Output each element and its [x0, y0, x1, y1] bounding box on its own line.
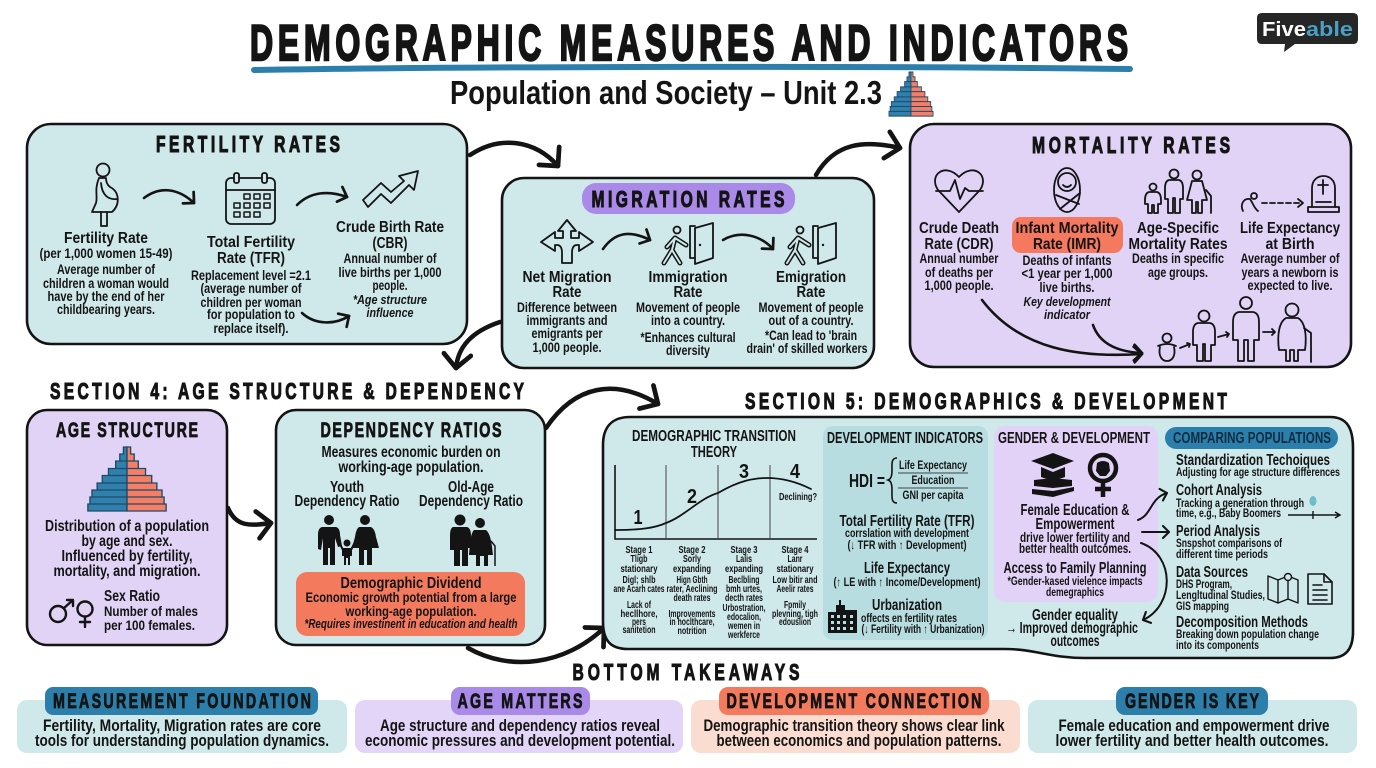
text: gender equality: Gender equality: [1032, 607, 1118, 624]
text: sex ratio: per 100 females.: [104, 618, 195, 633]
text: stage 4: Low bitir and: [772, 574, 818, 586]
text: comparing populations list: into its components: [1176, 638, 1259, 652]
heading: fertility rates: FERTILITY RATES: [156, 132, 340, 158]
text: emigration rate: Rate: [796, 284, 826, 301]
text: stage 4: Aeelir rates: [776, 583, 814, 595]
arrow: dependency to section 5 bottom: [468, 628, 604, 662]
icon: growth arrow: [363, 171, 418, 207]
callout: demographic dividend: working-age population.: [345, 604, 476, 619]
text: total fertility rate: (average number of: [200, 281, 302, 296]
text: net migration rate: immigrants and: [526, 313, 608, 328]
chart: demographic transition curve: 1: [634, 507, 642, 529]
text: crude birth rate: [336, 219, 444, 320]
heading: age structure: AGE STRUCTURE: [56, 418, 198, 442]
text: sex ratio: Sex Ratio: [104, 588, 160, 605]
text: stage 1: [614, 544, 665, 636]
icon: person entering door: [664, 223, 713, 264]
text: access to family planning: *Gender-kased vielence impacts: [1008, 574, 1143, 588]
text: immigration rate: [636, 269, 740, 358]
text: stage 1: pers: [632, 616, 646, 628]
text: net migration rate: Net Migration: [522, 269, 612, 286]
heading: mortality rates: MORTALITY RATES: [1032, 133, 1230, 159]
text: net migration rate: 1,000 people.: [532, 340, 602, 355]
panel: mortality rates: [910, 124, 1351, 367]
callout: demographic dividend: *Requires investinent in education and health: [304, 617, 518, 631]
text: comparing populations list: Tracking a generation through: [1176, 496, 1304, 510]
arrow: [723, 235, 773, 249]
heading: section 5: SECTION 5: DEMOGRAPHICS & DEVELOPMENT: [745, 389, 1227, 415]
text: female education and empowerment: [1019, 502, 1131, 556]
body text: economic pressures and development potential.: [365, 732, 675, 750]
text: gender equality: outcomes: [1050, 633, 1100, 650]
text: crude birth rate: people.: [372, 278, 408, 293]
text: total fertility rate: replace itself).: [214, 321, 288, 336]
text: crude death rate: Annual number: [920, 251, 999, 266]
text: infant mortality rate: <1 year per 1,000: [1022, 266, 1112, 281]
text: emigration rate: drain' of skilled workers: [746, 341, 868, 356]
text: total fertility rate: Rate (TFR): [217, 250, 285, 267]
chart: demographic transition curve: 4: [790, 461, 801, 483]
logo: Fiveable: able: [1306, 19, 1353, 41]
text: net migration rate: emigrants per: [532, 326, 603, 341]
formula: HDI: Education: [912, 473, 954, 487]
logo: Fiveable: Five: [1262, 19, 1306, 41]
text: stage 2: Stage 2: [678, 544, 706, 556]
text: youth dependency ratio: [294, 479, 400, 510]
text: old-age dependency ratio: Dependency Ratio: [419, 493, 523, 510]
icon: document: [1308, 574, 1332, 604]
takeaway: development connection: [691, 687, 1020, 753]
text: age structure description: [45, 518, 209, 580]
text: total fertility rate: for population to: [207, 307, 295, 322]
text: crude birth rate: Crude Birth Rate: [336, 219, 444, 236]
text: gender equality: → Improved demographic: [1006, 620, 1138, 637]
text: net migration rate: Rate: [552, 284, 582, 301]
text: infant mortality rate: Rate (IMR): [1033, 236, 1101, 253]
callout: demographic dividend: Economic growth potential from a large: [306, 590, 517, 605]
icon: pregnant woman: [92, 164, 118, 226]
text: immigration rate: Movement of people: [636, 300, 740, 315]
text: stage 3: expanding: [725, 563, 763, 575]
text: infant mortality rate: indicator: [1044, 308, 1091, 322]
text: life expectancy at birth: Average number of: [1240, 251, 1340, 266]
text: immigration rate: into a country.: [651, 313, 725, 328]
text: life expectancy at birth: expected to live.: [1248, 278, 1332, 293]
text: life expectancy: Life Expectancy: [864, 560, 950, 577]
text: crude death rate: [919, 220, 999, 293]
body text: between economics and population patterns.: [716, 732, 1002, 750]
arrow: [144, 190, 194, 203]
text: age structure description: by age and sex.: [82, 533, 172, 550]
text: infant mortality rate: [1016, 220, 1119, 322]
text: age-specific mortality rates: Mortality Rates: [1128, 236, 1228, 253]
heading: development indicators: DEVELOPMENT INDICATORS: [827, 430, 983, 447]
text: comparing populations list: Breaking down population change: [1176, 627, 1319, 641]
pill heading: GENDER IS KEY: [1125, 689, 1259, 713]
text: stage 1: hecllhore,: [620, 608, 658, 620]
icon: heart with pulse: [935, 170, 983, 212]
text: stage 1: stationary: [620, 563, 658, 575]
text: access to family planning: Access to Family Planning: [1004, 560, 1146, 577]
arrow: age structure to dependency: [228, 508, 271, 525]
body text: [704, 717, 1005, 750]
text: stage 3: edocalion,: [727, 611, 761, 623]
text: female education and empowerment: Female Education &: [1020, 502, 1130, 519]
text: comparing populations list: time, e.g., Baby Boomers: [1176, 506, 1281, 520]
text: stage 1: sanitetion: [622, 624, 656, 636]
takeaway: measurement foundation: [17, 687, 347, 753]
text: total fertility rate: Replacement level =2.1: [191, 268, 311, 283]
text: stage 3: Stage 3: [730, 544, 758, 556]
icon: family: [318, 515, 379, 565]
text: stage 2: Sorly: [683, 553, 701, 565]
text: age-specific mortality rates: Age-Specific: [1137, 220, 1219, 237]
icon: elderly couple: [450, 514, 495, 566]
text: emigration rate: Movement of people: [758, 300, 864, 315]
chart: demographic transition curve: Declining?: [779, 491, 817, 503]
icon: small population pyramid: [889, 72, 933, 116]
text: stage 3: Beclbling: [728, 574, 760, 586]
text: comparing populations list: Cohort Analysis: [1176, 482, 1262, 499]
icon: population pyramid: [88, 447, 166, 511]
panel: development indicators: [823, 426, 988, 640]
body text: Age structure and dependency ratios reveal: [380, 717, 660, 735]
heading: demographic transition theory: DEMOGRAPHIC TRANSITION: [632, 428, 796, 445]
text: emigration rate: out of a country.: [768, 313, 854, 328]
heading: demographic transition theory: THEORY: [691, 444, 737, 461]
text: comparing populations list: DHS Program,: [1176, 577, 1232, 591]
text: total fertility rate correlation: [840, 513, 974, 552]
heading: section 4: SECTION 4: AGE STRUCTURE & DEPENDENCY: [50, 379, 524, 405]
text: crude death rate: Rate (CDR): [924, 236, 994, 253]
icon: male and female symbols: [50, 600, 92, 627]
text: comparing populations list: Snspshot comparisons of: [1176, 536, 1283, 550]
text: fertility rate: Fertility Rate: [64, 230, 148, 247]
text: access to family planning: [1004, 560, 1146, 599]
text: stage 4: edouslion: [779, 616, 811, 628]
text: comparing populations list: different time periods: [1176, 547, 1268, 561]
text: fertility rate: children a woman would: [43, 276, 169, 291]
text: fertility rate: [40, 230, 172, 317]
icon: swaddled baby: [1054, 168, 1080, 212]
panel: age structure: [27, 410, 227, 645]
callout: demographic dividend: [296, 572, 525, 636]
icon: crossroads: [541, 220, 593, 263]
text: life expectancy: (↑ LE with ↑ Income/Development): [834, 575, 980, 589]
text: total fertility rate: children per woman: [200, 295, 302, 310]
text: fertility rate: (per 1,000 women 15-49): [40, 246, 172, 261]
text: total fertility rate: Total Fertility: [207, 234, 295, 251]
icon: city buildings: [828, 600, 857, 633]
text: infant mortality rate: Infant Mortality: [1016, 220, 1119, 237]
text: gender equality: [1006, 607, 1138, 650]
icon: calendar: [226, 173, 275, 224]
text: stage 2: in hoclthcare,: [670, 616, 715, 628]
text: stage 4: [772, 544, 818, 628]
text: stage 1: Stage 1: [626, 544, 653, 556]
arrow: dependency to section 5 top: [546, 389, 658, 428]
pill heading: AGE MATTERS: [458, 689, 583, 713]
text: stage 1: Lack of: [627, 599, 651, 611]
chart: demographic transition curve: [615, 461, 817, 539]
icon: female symbol with fist: [1090, 455, 1116, 497]
text: life expectancy: [834, 560, 980, 589]
text: age-specific mortality rates: [1128, 220, 1228, 280]
highlight pill: infant mortality rate: [1012, 217, 1123, 253]
arrow: [297, 193, 347, 205]
body text: lower fertility and better health outcomes.: [1056, 732, 1328, 750]
body text: [365, 717, 675, 750]
text: stage 3: werkferce: [727, 629, 760, 641]
text: female education and empowerment: drive lower fertility and: [1020, 530, 1130, 545]
text: dependency description: [322, 444, 500, 476]
text: comparing populations list: Decomposition Methods: [1176, 614, 1308, 631]
text: urbanization: Urbanization: [872, 597, 942, 614]
text: comparing populations list: Period Analysis: [1176, 523, 1260, 540]
text: stage 2: Improvements: [668, 608, 716, 620]
text: stage 4: stationary: [776, 563, 814, 575]
text: sex ratio: [104, 588, 198, 633]
arrow: to cohort analysis: [1138, 493, 1167, 520]
arrow: IMR to life stages: [1093, 325, 1142, 353]
text: stage 1: ane Acarh cates: [614, 583, 665, 595]
text: age-specific mortality rates: age groups.: [1148, 265, 1208, 280]
text: dependency description: Measures economic burden on: [322, 444, 500, 461]
text: stage 4: plevning, tigh: [772, 608, 818, 620]
text: dependency description: working-age population.: [338, 459, 484, 476]
text: immigration rate: Rate: [674, 284, 703, 301]
body text: [1056, 717, 1330, 750]
panel: dependency ratios: [276, 410, 545, 645]
text: immigration rate: diversity: [666, 343, 710, 358]
text: life expectancy at birth: [1240, 220, 1340, 293]
text: stage 1: Tligb: [630, 553, 648, 565]
arrow: fertility to migration: [470, 143, 558, 166]
text: infant mortality rate: Deaths of infants: [1022, 253, 1112, 268]
text: life expectancy at birth: at Birth: [1266, 236, 1314, 253]
text: stage 2: rater, Aeclining: [666, 583, 718, 595]
text: stage 2: notrition: [678, 625, 706, 637]
text: youth dependency ratio: Youth: [330, 479, 364, 496]
text: fertility rate: childbearing years.: [57, 302, 155, 317]
text: stage 3: Lalis: [736, 553, 752, 565]
text: comparing populations list: Lengltudinal Studies,: [1176, 588, 1265, 602]
text: urbanization: [861, 597, 984, 636]
text: stage 1: Digl; shlb: [622, 574, 656, 586]
text: crude birth rate: (CBR): [372, 235, 408, 252]
text: emigration rate: [746, 269, 868, 356]
text: total fertility rate correlation: corrslation with development: [845, 526, 969, 540]
text: crude death rate: Crude Death: [919, 220, 999, 237]
arrow: to period analysis: [1142, 531, 1169, 533]
text: stage 2: Hign Gbth: [676, 574, 708, 586]
text: infant mortality rate: live births.: [1040, 280, 1094, 295]
text: stage 2: expanding: [673, 563, 711, 575]
heading: bottom takeaways: BOTTOM TAKEAWAYS: [573, 660, 799, 686]
text: crude death rate: 1,000 people.: [924, 278, 994, 293]
arrow: migration to section 4: [456, 322, 500, 368]
text: crude birth rate: live births per 1,000: [338, 265, 442, 280]
text: stage 4: Lanr: [788, 553, 802, 565]
text: net migration rate: Difference between: [517, 300, 617, 315]
text: age structure description: Distribution of a population: [45, 518, 209, 535]
text: fertility rate: Average number of: [57, 262, 155, 277]
text: emigration rate: Emigration: [776, 269, 846, 286]
text: stage 4: Stage 4: [782, 544, 809, 556]
text: crude birth rate: Annual number of: [344, 251, 437, 266]
text: stage 3: wemen in: [727, 620, 760, 632]
text: stage 4: Fpmily: [784, 599, 806, 611]
logo: Fiveable: [1257, 13, 1358, 52]
text: net migration rate: [517, 269, 617, 355]
arrow: [302, 313, 349, 322]
text: life expectancy at birth: years a newborn is: [1242, 265, 1338, 280]
text: stage 3: decth rates: [725, 592, 763, 604]
text: age structure description: mortality, and migration.: [54, 563, 200, 580]
formula: HDI: [849, 458, 968, 503]
arrow: [603, 234, 650, 249]
text: stage 3: Urbostration,: [722, 602, 766, 614]
body text: Fertility, Mortality, Migration rates are core: [43, 717, 321, 735]
text: stage 3: bmh urtes,: [726, 583, 762, 595]
text: crude birth rate: *Age structure: [353, 293, 427, 307]
arrow: CDR to life stages: [982, 300, 1142, 355]
text: comparing populations list: Data Sources: [1176, 564, 1248, 581]
text: total fertility rate: [191, 234, 311, 336]
chart: demographic transition curve: 3: [739, 461, 749, 483]
text: old-age dependency ratio: [419, 479, 523, 510]
text: immigration rate: Immigration: [648, 269, 728, 286]
body text: tools for understanding population dynamics.: [35, 732, 329, 750]
heading pill: migration rates: MIGRATION RATES: [592, 187, 784, 213]
text: emigration rate: *Can lead to 'brain: [765, 328, 857, 343]
icon: person leaving door: [787, 223, 836, 264]
icon: timeline: [1288, 496, 1340, 519]
formula: HDI: GNI per capita: [902, 488, 964, 502]
takeaway: gender is key: [1028, 687, 1357, 753]
subtitle: Population and Society – Unit 2.3: [450, 74, 882, 111]
text: life expectancy at birth: Life Expectancy: [1240, 220, 1340, 237]
text: fertility rate: have by the end of her: [48, 289, 165, 304]
text: female education and empowerment: Empowerment: [1036, 516, 1115, 533]
text: youth dependency ratio: Dependency Ratio: [294, 493, 400, 510]
text: stage 3: [722, 544, 766, 641]
text: comparing populations list: [1176, 452, 1340, 652]
title: DEMOGRAPHIC MEASURES AND INDICATORS: [250, 15, 1128, 71]
body text: [35, 717, 329, 750]
panel: section 5 demographics and development: [603, 417, 1353, 658]
text: access to family planning: demegraphics: [1046, 585, 1104, 599]
text: age-specific mortality rates: Deaths in specific: [1132, 251, 1224, 266]
text: crude birth rate: influence: [366, 306, 414, 320]
icon: life stages sequence: [1158, 297, 1311, 362]
icon: graduation cap and books: [1031, 453, 1074, 497]
takeaway: age matters: [355, 687, 683, 753]
text: female education and empowerment: better health outcomes.: [1019, 541, 1131, 556]
callout: demographic dividend: Demographic Dividend: [340, 575, 482, 592]
text: old-age dependency ratio: Old-Age: [448, 479, 494, 496]
text: total fertility rate correlation: Total Fertility Rate (TFR): [840, 513, 974, 530]
icon: map: [1268, 574, 1298, 603]
title underline: [254, 67, 1130, 70]
text: sex ratio: Number of males: [104, 604, 198, 619]
icon: age groups: [1145, 170, 1211, 213]
arrow: migration to mortality: [816, 144, 900, 175]
heading: dependency ratios: DEPENDENCY RATIOS: [320, 418, 502, 442]
heading: gender and development: GENDER & DEVELOPMENT: [998, 430, 1150, 447]
text: urbanization: (↓ Fertility with ↑ Urbanization): [862, 622, 984, 636]
text: immigration rate: *Enhances cultural: [640, 330, 736, 345]
text: crude death rate: of deaths per: [925, 265, 994, 280]
formula: HDI: HDI =: [849, 471, 885, 491]
text: age structure description: Influenced by fertility,: [62, 548, 192, 565]
arrow: to gender equality: [1141, 543, 1167, 620]
text: total fertility rate correlation: (↓ TFR with ↑ Development): [848, 538, 967, 552]
heading pill: comparing populations: [1165, 427, 1338, 449]
icon: baby, arrow to gravestone: [1242, 176, 1339, 212]
text: urbanization: offects en fertility rates: [861, 611, 957, 625]
heading: demographic transition theory: [632, 428, 796, 461]
body text: Demographic transition theory shows clear link: [704, 717, 1005, 735]
formula: HDI: Life Expectancy: [899, 458, 967, 472]
text: infant mortality rate: Key development: [1024, 295, 1111, 309]
panel: migration rates: [502, 178, 874, 368]
chart: demographic transition curve: 2: [687, 486, 697, 508]
panel: fertility rates: [27, 124, 467, 344]
text: comparing populations list: GIS mapping: [1176, 599, 1229, 613]
panel: gender and development: [994, 426, 1158, 602]
pill heading: MEASUREMENT FOUNDATION: [53, 689, 311, 713]
pill heading: DEVELOPMENT CONNECTION: [726, 689, 982, 713]
text: stage 2: death rates: [674, 592, 711, 604]
text: stage 2: [666, 544, 718, 637]
